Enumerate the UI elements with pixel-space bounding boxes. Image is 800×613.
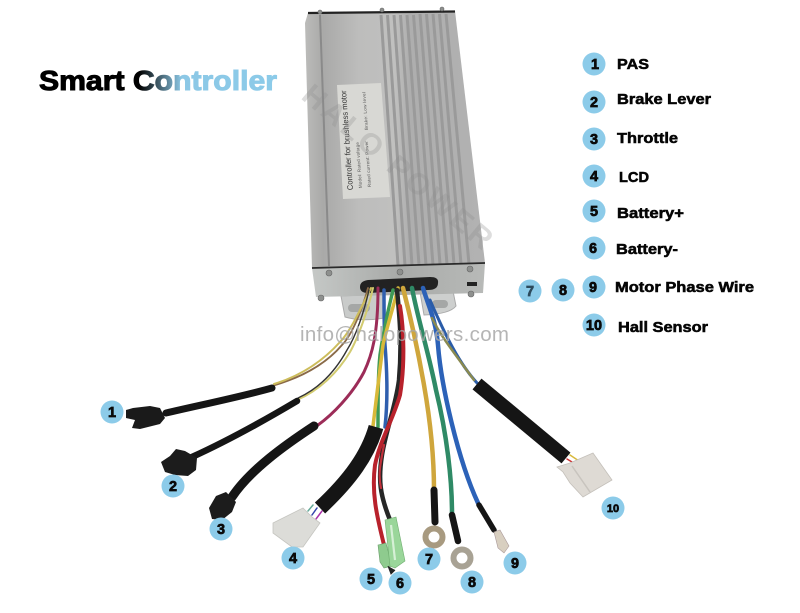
- legend item: Throttle: Throttle: [617, 130, 678, 147]
- legend item: Motor Phase Wire: Motor Phase Wire: [615, 279, 754, 296]
- legend: [518, 52, 754, 336]
- heat sink ribs: [320, 14, 469, 266]
- diagram badge 8: [460, 570, 484, 594]
- legend item: PAS: PAS: [617, 56, 649, 73]
- watermark: HALO POWER: HALO POWER: [296, 78, 499, 257]
- diagram badge 2: 2: [169, 479, 177, 495]
- diagram badge 9: [504, 552, 526, 574]
- legend item: Battery+: [582, 200, 684, 222]
- diagram badge 3: [210, 518, 232, 540]
- screws: [318, 7, 474, 301]
- legend item: Hall Sensor: [582, 314, 708, 336]
- legend item: Battery+: Battery+: [617, 205, 684, 222]
- legend item: Battery+: 5: [590, 204, 598, 220]
- product label: Rated current: Power: [364, 141, 372, 187]
- diagram badge 7: [418, 548, 440, 570]
- cable 2: brake lever: [161, 288, 373, 476]
- wire 8: motor phase green: [412, 288, 470, 566]
- controller box: [305, 7, 485, 320]
- legend item: Motor Phase Wire: [518, 276, 754, 302]
- wire 9: motor phase blue: [423, 288, 509, 553]
- diagram badge 3: 3: [217, 522, 225, 538]
- diagram badge 6: 6: [396, 576, 404, 592]
- diagram badge 1: [100, 400, 124, 424]
- legend item: LCD: 4: [590, 169, 598, 185]
- legend item: Hall Sensor: Hall Sensor: [618, 319, 708, 336]
- diagram badge 4: 4: [289, 551, 297, 567]
- diagram badge 7: 7: [425, 552, 433, 568]
- title: Smart Controller: [39, 65, 277, 96]
- legend item: Motor Phase Wire: 7: [526, 284, 534, 300]
- legend item: Hall Sensor: 10: [586, 318, 602, 334]
- legend item: Battery-: Battery-: [616, 241, 678, 258]
- legend item: Throttle: [582, 128, 678, 150]
- legend item: Brake Lever: 2: [590, 95, 598, 111]
- legend item: PAS: [582, 52, 649, 76]
- diagram badge 4: [282, 546, 304, 570]
- diagram badge 9: 9: [511, 556, 519, 572]
- wire 5 and 6: battery: [374, 290, 405, 574]
- legend item: LCD: [582, 164, 649, 188]
- front face: [312, 263, 485, 297]
- diagram badge 5: [360, 568, 382, 590]
- diagram badge 10: [602, 496, 624, 520]
- legend item: PAS: 1: [591, 57, 599, 73]
- cable 10: hall sensor: [430, 300, 612, 497]
- diagram badge 8: 8: [468, 575, 476, 591]
- legend item: Motor Phase Wire: 9: [589, 280, 597, 296]
- diagram badge 10: 10: [607, 503, 619, 515]
- product label: Model: Rated voltage: [355, 142, 363, 188]
- product label: [337, 83, 390, 199]
- legend item: Brake Lever: Brake Lever: [617, 91, 711, 108]
- legend item: Throttle: 3: [590, 132, 598, 148]
- diagram badge 6: [388, 572, 412, 594]
- diagram badge 2: [162, 474, 184, 498]
- wire gasket: [360, 277, 438, 293]
- legend item: Battery-: [582, 236, 678, 260]
- wire 7: motor phase yellow: [403, 288, 442, 546]
- cable 1: PAS: [126, 288, 371, 429]
- diagram badge 1: 1: [108, 405, 116, 421]
- diagram badge 5: 5: [367, 572, 375, 588]
- legend item: Battery-: 6: [589, 241, 597, 257]
- mounting tabs: [341, 291, 456, 320]
- cable 4: LCD: [273, 288, 398, 547]
- product label: Controller for brushless motor: [339, 90, 355, 190]
- product label: Brake: Low level: [361, 92, 369, 130]
- watermark: email: info@halopowers.com: [300, 323, 509, 346]
- cable 3: throttle: [209, 288, 378, 520]
- legend item: Motor Phase Wire: 8: [559, 283, 567, 299]
- legend item: Brake Lever: [582, 90, 711, 114]
- legend item: LCD: LCD: [619, 169, 649, 186]
